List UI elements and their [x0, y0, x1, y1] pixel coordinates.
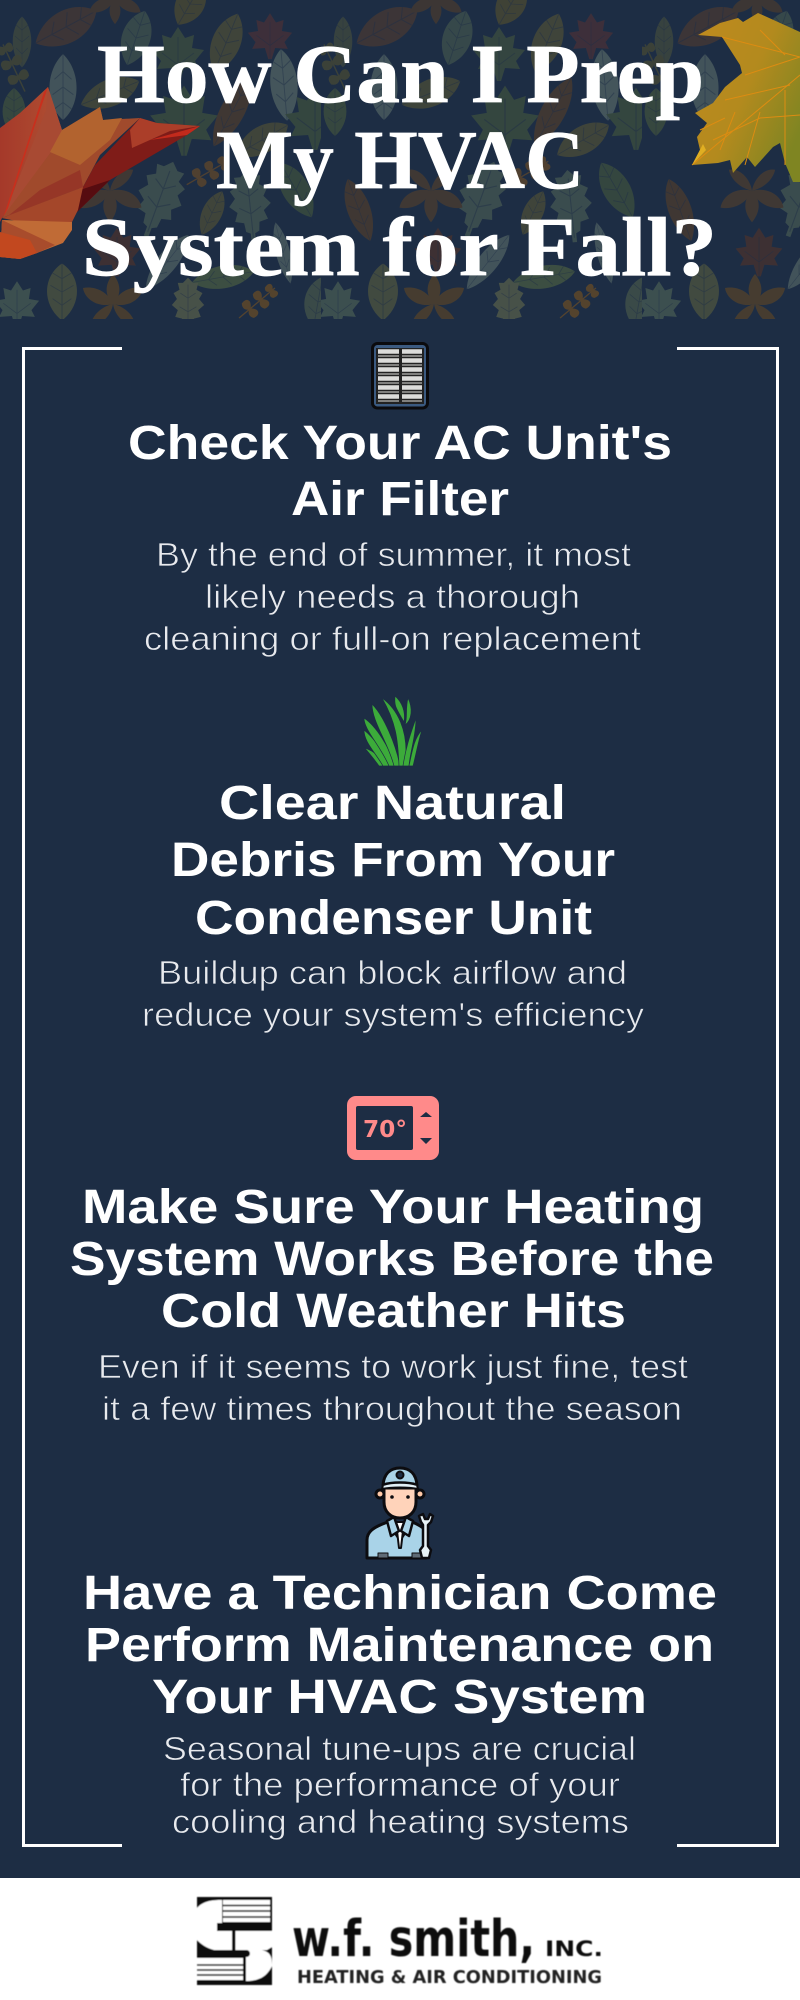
text: debris description: Buildup can block airflow and [158, 954, 627, 991]
logo: w.f. smith [197, 1897, 603, 1988]
logo wordmark: w.f. smith, [292, 1910, 535, 1969]
heading: technician maintenance: Have a Technician Come [83, 1567, 717, 1620]
title: System for Fall? [82, 201, 717, 294]
icon: thermostat: 70° [363, 1117, 407, 1143]
text: heating description: Even if it seems to work just fine, test [98, 1348, 688, 1385]
text: technician description: cooling and heating systems [172, 1803, 629, 1840]
frame around tips [24, 348, 778, 1846]
heading: clear natural debris: Condenser Unit [195, 892, 592, 945]
text: technician description: for the performance of your [180, 1766, 620, 1803]
heading: technician maintenance [83, 1567, 717, 1724]
heading: clear natural debris: Clear Natural [219, 777, 566, 830]
text: air filter description: cleaning or full-on replacement [144, 620, 641, 657]
text: technician description: Seasonal tune-ups are crucial [163, 1730, 636, 1767]
text: technician description [163, 1730, 636, 1840]
text: heating description: it a few times throughout the season [102, 1390, 682, 1427]
text: heating description [98, 1348, 688, 1427]
text: debris description: reduce your system's efficiency [142, 996, 645, 1033]
title [82, 28, 717, 294]
title: My HVAC [216, 114, 584, 207]
heading: clear natural debris [171, 777, 615, 945]
panel: tip 2 condenser debris [142, 696, 645, 1033]
heading: heating system: System Works Before the [70, 1233, 714, 1286]
logo INC: INC. [545, 1937, 603, 1961]
text: air filter description: likely needs a thorough [205, 578, 580, 615]
illustration: red leaf [0, 87, 200, 259]
panel: tip 4 technician [83, 1468, 717, 1840]
heading: technician maintenance: Perform Maintenance on [85, 1619, 714, 1672]
logo tagline: HEATING & AIR CONDITIONING [297, 1967, 602, 1988]
logo mark [197, 1897, 272, 1985]
panel: tip 3 heating system [70, 1096, 714, 1427]
illustration: yellow maple leaf [692, 13, 800, 182]
panel: tip 1 air filter [128, 344, 672, 657]
heading: check air filter [128, 417, 672, 526]
heading: heating system: Cold Weather Hits [161, 1285, 626, 1338]
icon: grass [364, 696, 422, 766]
text: air filter description: By the end of summer, it most [156, 536, 631, 573]
footer band [0, 1878, 800, 2000]
icon: thermostat [347, 1096, 439, 1160]
heading: check air filter: Check Your AC Unit's [128, 417, 672, 470]
header band: autumn leaf pattern [0, 0, 800, 319]
heading: check air filter: Air Filter [291, 473, 509, 526]
heading: technician maintenance: Your HVAC System [152, 1671, 647, 1724]
heading: clear natural debris: Debris From Your [171, 834, 615, 887]
icon: technician [367, 1468, 433, 1558]
text: air filter description [144, 536, 641, 657]
title: How Can I Prep [97, 28, 704, 121]
heading: heating system: Make Sure Your Heating [82, 1181, 704, 1234]
icon: air filter [372, 344, 428, 408]
text: debris description [142, 954, 645, 1033]
heading: heating system [70, 1181, 714, 1338]
